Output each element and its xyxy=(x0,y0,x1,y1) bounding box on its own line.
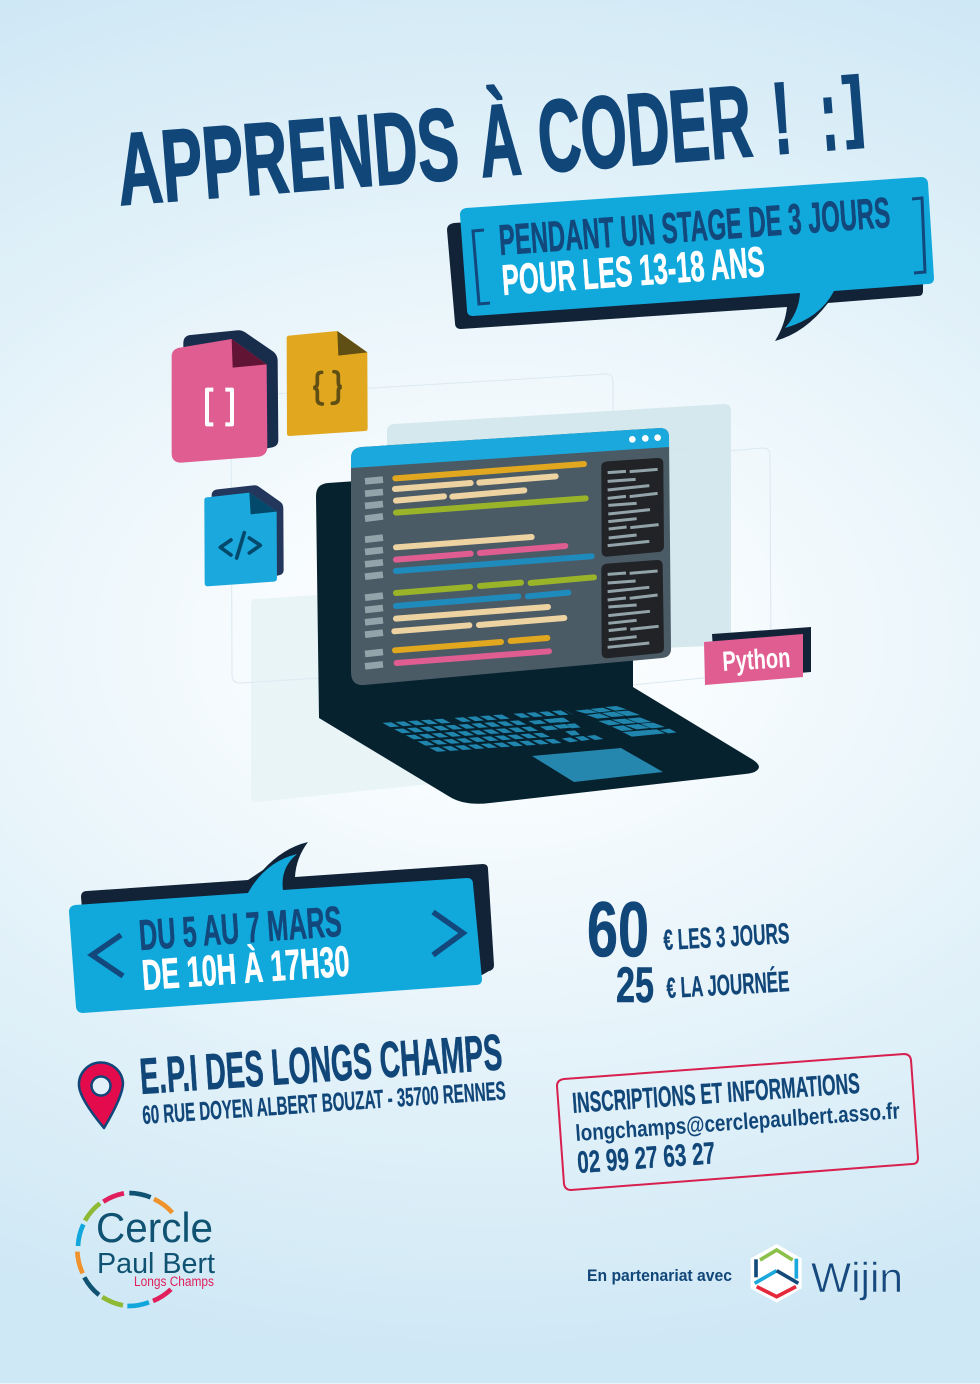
logo words Paul Bert: Paul Bert xyxy=(97,1248,215,1280)
title: APPRENDS xyxy=(113,87,463,227)
laptop illustration xyxy=(316,428,759,804)
callout line 2: POUR LES 13-18 ANS xyxy=(500,238,766,305)
callout body xyxy=(460,177,934,328)
price label one day: € LA JOURNÉE xyxy=(665,964,790,1005)
window xyxy=(351,428,671,685)
code minimap top xyxy=(601,458,664,557)
trackpad xyxy=(532,748,663,782)
title xyxy=(113,55,868,227)
callout: dates and hours xyxy=(69,842,494,1013)
ghost background panels xyxy=(231,374,771,802)
logo word Cercle: Cercle xyxy=(96,1204,213,1251)
pricing xyxy=(587,885,790,1013)
chevron left xyxy=(92,935,123,976)
callout shadow xyxy=(447,190,923,341)
partner label: En partenariat avec xyxy=(587,1266,732,1285)
title: : xyxy=(816,57,842,172)
window title bar xyxy=(351,428,669,468)
icon: pink file xyxy=(172,330,278,463)
contact phone: 02 99 27 63 27 xyxy=(576,1135,716,1180)
callout: stage duration and ages xyxy=(447,177,934,341)
venue name: E.P.I DES LONGS CHAMPS xyxy=(138,1023,504,1105)
callout shadow xyxy=(81,842,494,1000)
laptop body xyxy=(316,462,759,804)
line numbers xyxy=(365,480,383,666)
icon: blue file xyxy=(204,485,284,586)
code minimap bottom xyxy=(601,560,664,658)
label: Python: Python xyxy=(721,642,791,677)
logo ring xyxy=(77,1193,172,1306)
logo: Cercle Paul Bert xyxy=(77,1193,215,1306)
right bracket xyxy=(912,198,925,273)
code lines xyxy=(394,464,594,663)
price 25: 25 xyxy=(616,957,654,1013)
contact email: longchamps@cerclepaulbert.asso.fr xyxy=(575,1097,901,1146)
logo: Wijin xyxy=(751,1244,903,1303)
contact box xyxy=(557,1054,918,1190)
left bracket xyxy=(473,230,490,304)
icon: map pin xyxy=(79,1062,123,1128)
icon: orange file xyxy=(287,331,368,436)
title: À xyxy=(475,82,524,199)
Wijin hexagon xyxy=(751,1244,802,1303)
price label three days: € LES 3 JOURS xyxy=(663,918,790,957)
callout body xyxy=(69,854,482,1013)
title: ] xyxy=(840,60,867,149)
date: DU 5 AU 7 MARS xyxy=(137,898,343,960)
screen xyxy=(351,428,671,685)
window dots xyxy=(629,434,661,443)
hours: DE 10H À 17H30 xyxy=(140,938,351,1000)
Wijin word: Wijin xyxy=(811,1254,903,1301)
title: ! xyxy=(768,61,796,176)
label: Python xyxy=(704,627,811,685)
chevron right xyxy=(433,912,463,955)
logo words Longs Champs: Longs Champs xyxy=(134,1274,214,1289)
keyboard keys xyxy=(386,706,677,750)
price 60: 60 xyxy=(587,885,649,973)
venue xyxy=(138,1023,507,1130)
venue address: 60 RUE DOYEN ALBERT BOUZAT - 35700 RENNES xyxy=(141,1075,507,1130)
title: CODER xyxy=(534,64,756,194)
